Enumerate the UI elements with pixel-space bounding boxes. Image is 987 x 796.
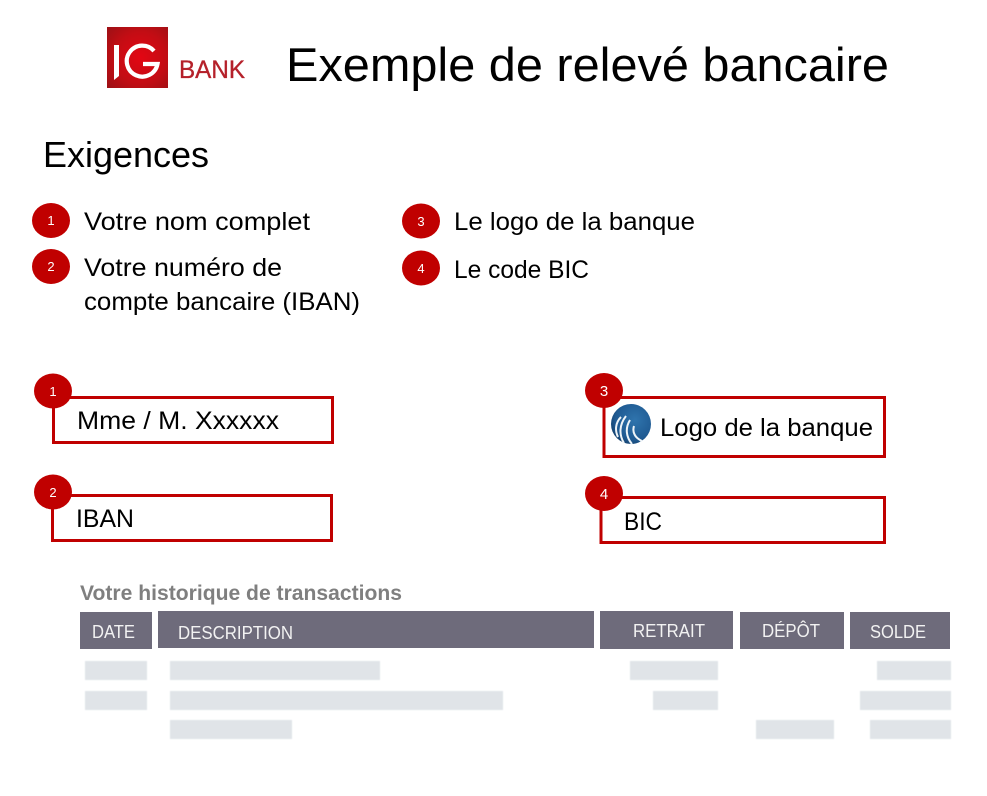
logo: IG Bank: BANK [179,56,245,84]
requirement 3 [402,204,695,238]
requirement 2 [32,249,360,316]
field: IBAN: IBAN [76,505,134,533]
requirements list [32,203,695,316]
table header [80,611,950,649]
transaction table [80,611,951,739]
table header: DESCRIPTION [178,623,293,643]
field: IBAN: 2 [49,485,57,500]
field: IBAN [34,474,332,540]
requirement 4: 4 [417,261,425,276]
logo: IG Bank [107,27,245,88]
requirement 1: Votre nom complet [84,208,310,236]
heading: Exigences: Exigences [43,134,209,175]
blurred table rows [85,661,951,739]
requirement 2: 2 [47,259,55,274]
field: BIC: 4 [600,486,608,503]
table header: RETRAIT [633,621,705,641]
field: bank logo: 3 [600,383,608,400]
field: name [34,374,332,442]
field: BIC: BIC [624,508,662,536]
table header: DATE [92,622,135,642]
requirement 4 [402,250,589,286]
table header: SOLDE [870,622,926,642]
title: Exemple de relevé bancaire [286,38,889,91]
field: BIC [585,476,884,542]
requirement 3: 3 [417,214,425,229]
field: bank logo: Logo de la banque [660,414,873,442]
requirement 2: Votre numéro de [84,254,282,282]
field: name: 1 [49,384,57,399]
requirement 2: compte bancaire (IBAN) [84,288,360,316]
requirement 1: 1 [47,213,55,228]
requirement 3: Le logo de la banque [454,208,695,236]
requirement 4: Le code BIC [454,256,589,284]
icon: bank logo globe [611,404,651,444]
requirement 1 [32,203,310,238]
heading: transaction history: Votre historique de transactions [80,582,402,605]
field: name: Mme / M. Xxxxxx [77,407,280,435]
field: bank logo [585,373,884,456]
table header: DÉPÔT [762,620,820,641]
